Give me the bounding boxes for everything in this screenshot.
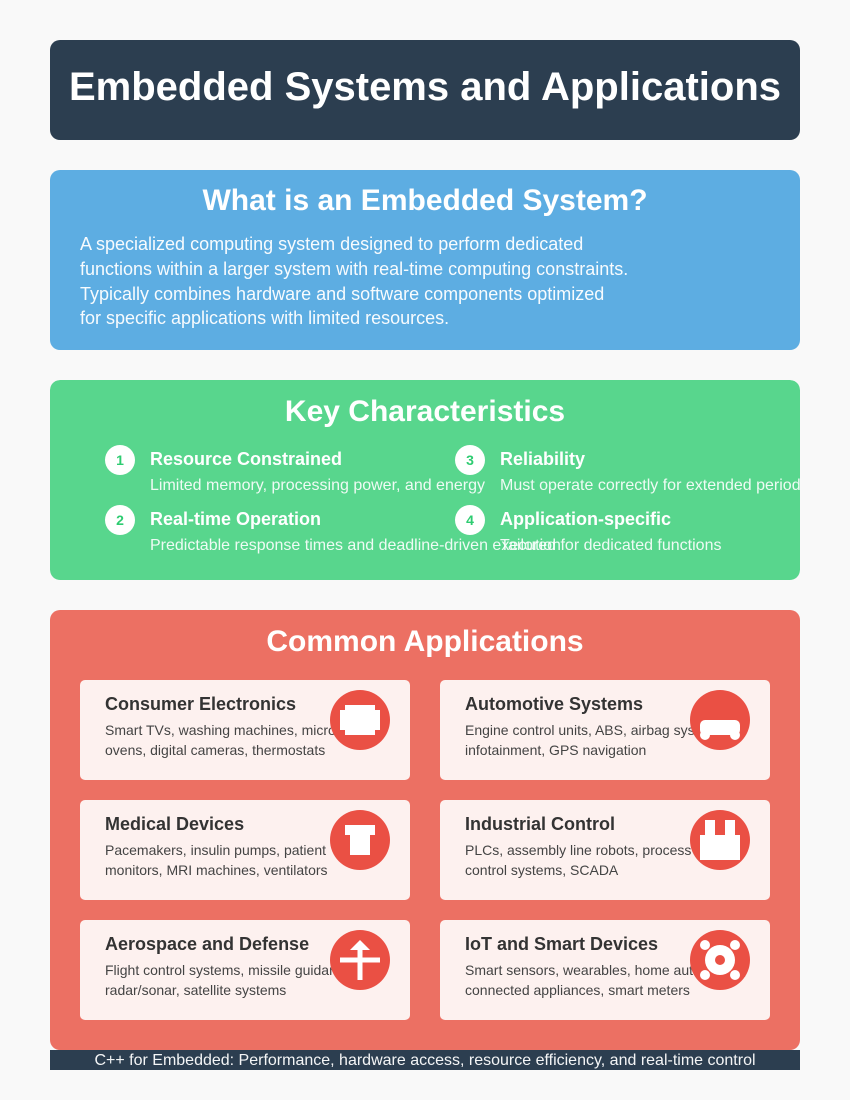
card: consumer electronics: ovens, digital cameras, thermostats: [105, 742, 325, 758]
card: iot and smart devices: connected appliances, smart meters: [465, 982, 690, 998]
card: industrial control: control systems, SCADA: [465, 862, 619, 878]
item 2: real-time operation: Predictable response times and deadline-driven execution: [150, 537, 561, 554]
footer bar: C++ for Embedded: Performance, hardware access, resource efficiency, and real-time control: [94, 1052, 756, 1069]
icon: consumer electronics: [330, 690, 390, 750]
card: iot and smart devices: [440, 920, 770, 1020]
item 4: application-specific: 4: [466, 512, 474, 528]
item 2: real-time operation: Real-time Operation: [150, 509, 321, 529]
definition text: Typically combines hardware and software components optimized: [80, 284, 604, 304]
item 4: application-specific: Application-specific: [500, 509, 671, 529]
card: iot and smart devices: IoT and Smart Devices: [465, 934, 658, 954]
card: medical devices: Medical Devices: [105, 814, 244, 834]
card: industrial control: PLCs, assembly line robots, process: [465, 842, 691, 858]
heading: common applications: Common Applications: [266, 625, 584, 658]
icon: connected nodes: [690, 930, 750, 990]
item 1: resource constrained: Limited memory, processing power, and energy: [150, 477, 485, 494]
card: medical devices: [80, 800, 410, 900]
definition text: A specialized computing system designed to perform dedicated: [80, 234, 583, 254]
item 1: resource constrained: [105, 445, 485, 494]
item 1: resource constrained: 1: [116, 452, 124, 468]
panel: key characteristics: [50, 380, 809, 580]
heading: what is an embedded system: What is an Embedded System?: [202, 184, 648, 217]
card: automotive systems: Engine control units, ABS, airbag systems,: [465, 722, 729, 738]
item 4: application-specific: Tailored for dedicated functions: [500, 537, 721, 554]
item 2: real-time operation: 2: [116, 512, 124, 528]
card: aerospace and defense: Aerospace and Defense: [105, 934, 309, 954]
card: aerospace and defense: radar/sonar, satellite systems: [105, 982, 286, 998]
card: automotive systems: [440, 680, 770, 780]
card: medical devices: monitors, MRI machines, ventilators: [105, 862, 328, 878]
card: medical devices: Pacemakers, insulin pumps, patient: [105, 842, 326, 858]
card: automotive systems: infotainment, GPS navigation: [465, 742, 646, 758]
item 3: reliability: 3: [466, 452, 474, 468]
title banner: [50, 40, 800, 140]
definition text: for specific applications with limited resources.: [80, 308, 449, 328]
card: aerospace and defense: [80, 920, 410, 1020]
definition text: functions within a larger system with real-time computing constraints.: [80, 259, 628, 279]
panel: what is an embedded system: [50, 170, 800, 350]
item 2: real-time operation: [105, 505, 561, 554]
icon: aircraft: [330, 930, 390, 990]
item 1: resource constrained: Resource Constrained: [150, 449, 342, 469]
card: automotive systems: Automotive Systems: [465, 694, 643, 714]
panel: common applications: [50, 610, 800, 1050]
card: industrial control: Industrial Control: [465, 814, 615, 834]
item 3: reliability: [455, 445, 809, 494]
icon: medical device: [330, 810, 390, 870]
card: consumer electronics: Consumer Electronics: [105, 694, 296, 714]
card: industrial control: [440, 800, 770, 900]
icon: factory: [690, 810, 750, 870]
item 3: reliability: Must operate correctly for extended periods: [500, 477, 809, 494]
item 3: reliability: Reliability: [500, 449, 585, 469]
card: iot and smart devices: Smart sensors, wearables, home automation,: [465, 962, 747, 978]
item 4: application-specific: [455, 505, 721, 554]
icon: car: [690, 690, 750, 750]
heading: key characteristics: Key Characteristics: [285, 395, 565, 428]
card: aerospace and defense: Flight control systems, missile guidance,: [105, 962, 356, 978]
title banner: Embedded Systems and Applications: [69, 65, 781, 109]
card: consumer electronics: Smart TVs, washing machines, microwave: [105, 722, 369, 738]
card: consumer electronics: [80, 680, 410, 780]
definition text: [80, 234, 628, 328]
